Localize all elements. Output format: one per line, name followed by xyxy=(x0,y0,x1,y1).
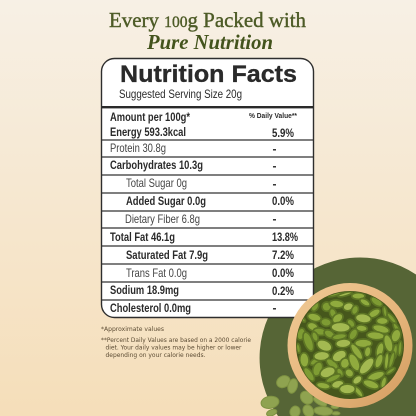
row labels: Total Sugar 0g xyxy=(126,176,187,190)
daily value column: 5.9% xyxy=(272,126,294,140)
daily value column: 0.0% xyxy=(272,194,294,208)
panel: nutrition facts table xyxy=(102,58,314,318)
footnotes: *Approximate values xyxy=(101,326,164,333)
loose pumpkin seeds xyxy=(260,373,340,416)
daily value column: 0.2% xyxy=(272,284,294,298)
daily value column: 7.2% xyxy=(272,248,294,262)
bowl rim xyxy=(288,283,412,408)
row labels: Cholesterol 0.0mg xyxy=(110,301,191,315)
daily value column: - xyxy=(272,142,276,156)
icon: wooden bowl of pumpkin seeds xyxy=(288,283,412,408)
daily value column: 13.8% xyxy=(272,230,298,244)
footnotes: **Percent Daily Values are based on a 2000 calorie xyxy=(101,337,251,344)
table heading: Nutrition Facts xyxy=(120,61,297,88)
green circle xyxy=(260,258,416,416)
footnotes: depending on your calorie needs. xyxy=(106,352,206,359)
row labels: Saturated Fat 7.9g xyxy=(126,248,208,262)
daily value column xyxy=(249,113,298,315)
title: Every 100g Packed with xyxy=(109,8,306,32)
row labels: Total Fat 46.1g xyxy=(110,230,175,244)
row labels: Energy 593.3kcal xyxy=(110,125,186,139)
row labels xyxy=(110,110,208,315)
row labels: Protein 30.8g xyxy=(110,141,166,155)
daily value column: 0.0% xyxy=(272,266,294,280)
daily value column: - xyxy=(272,159,276,173)
daily value column: - xyxy=(272,177,276,191)
row labels: Carbohydrates 10.3g xyxy=(110,158,203,172)
footnotes xyxy=(101,326,251,359)
row labels: Added Sugar 0.0g xyxy=(126,194,206,208)
daily value column: - xyxy=(272,301,276,315)
footnotes: diet. Your daily values may be higher or lower xyxy=(106,344,242,352)
serving size: Suggested Serving Size 20g xyxy=(119,87,242,101)
bowl interior xyxy=(296,291,404,399)
title: Pure Nutrition xyxy=(146,30,273,54)
row labels: Trans Fat 0.0g xyxy=(126,266,187,280)
seeds in bowl xyxy=(295,291,403,398)
row labels: Amount per 100g* xyxy=(110,110,190,124)
daily value column: - xyxy=(272,212,276,226)
title xyxy=(109,8,306,54)
row labels: Dietary Fiber 6.8g xyxy=(125,212,200,226)
daily value column: % Daily Value** xyxy=(249,113,297,120)
row labels: Sodium 18.9mg xyxy=(110,283,179,297)
